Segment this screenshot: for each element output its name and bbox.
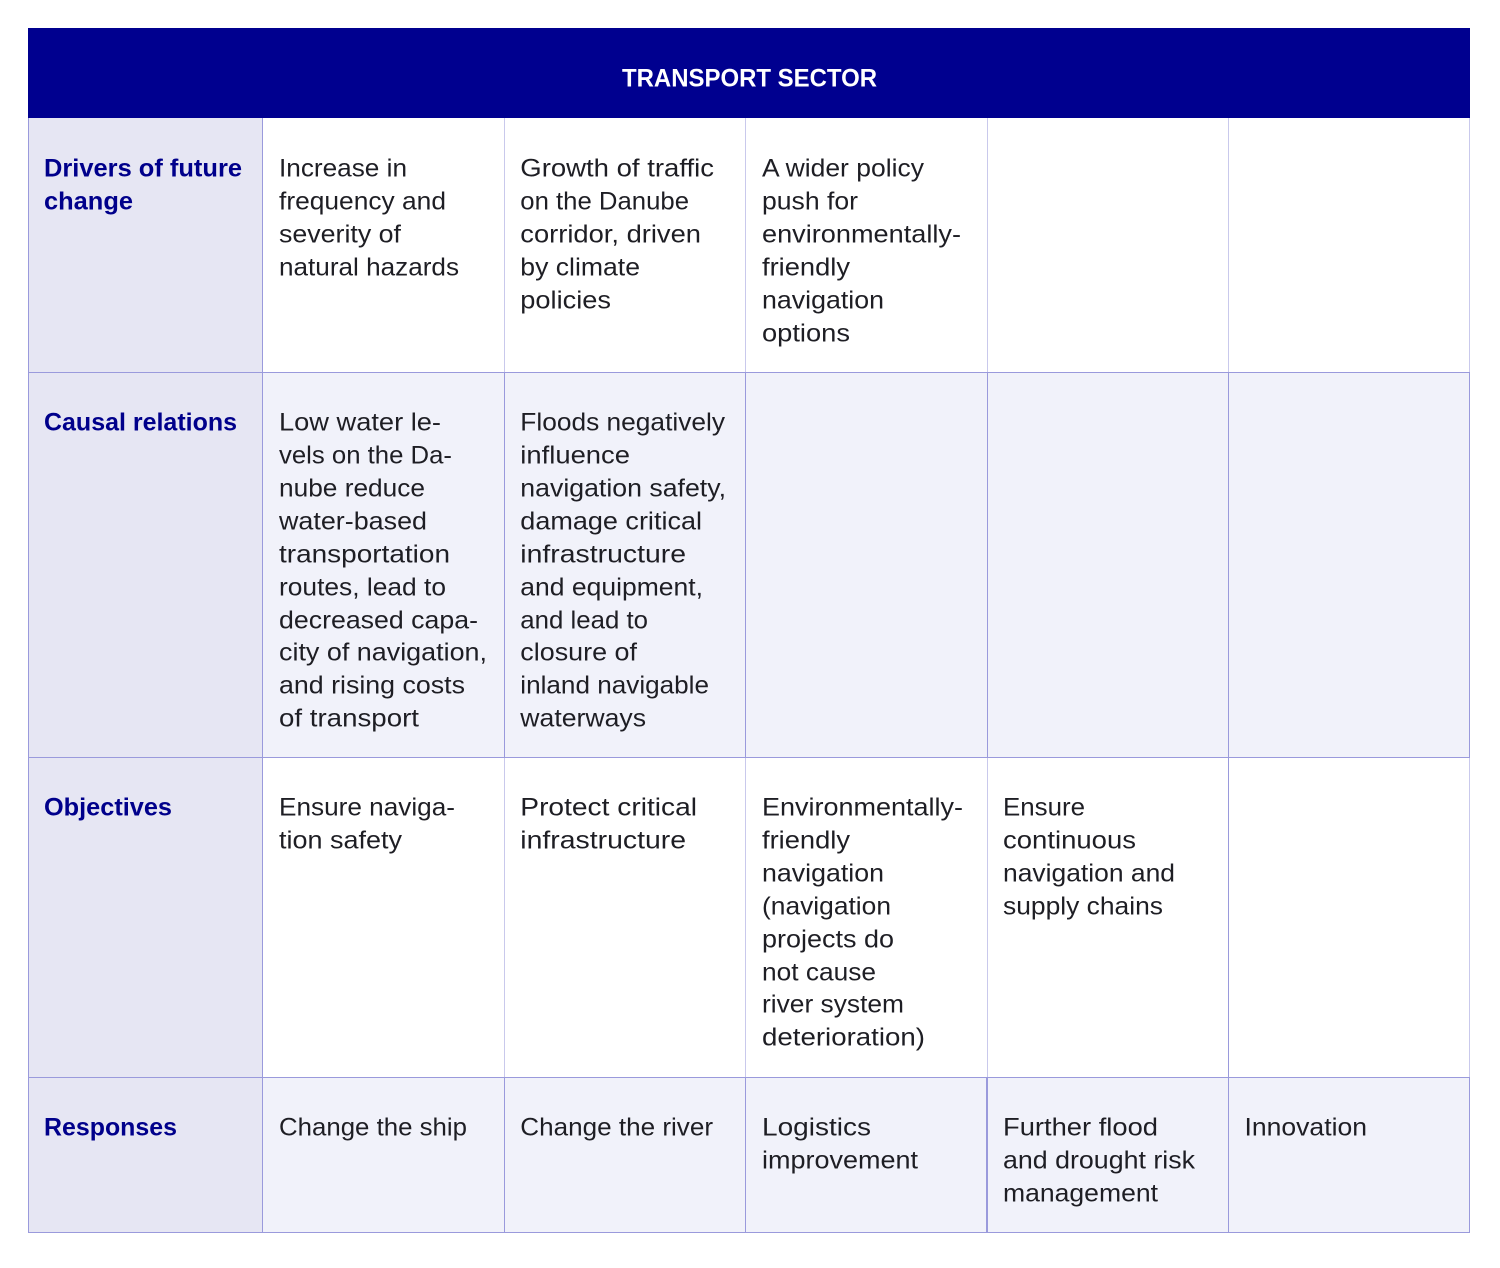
response: flood and drought risk management: Further flood — [1003, 1113, 1158, 1141]
row heading: responses: Responses — [44, 1113, 177, 1141]
objective: environmentally-friendly navigation: Environmentally- — [762, 793, 963, 821]
objective: navigation safety: tion safety — [279, 826, 403, 854]
causal relation: low water levels: decreased capa- — [279, 606, 478, 634]
causal relation: low water levels: city of navigation, — [279, 638, 487, 666]
response: flood and drought risk management — [1003, 1113, 1196, 1207]
objective: navigation safety: Ensure naviga- — [279, 793, 455, 821]
objective: continuous navigation — [1003, 793, 1175, 920]
objective: protect infrastructure: Protect critical — [520, 793, 697, 821]
response: logistics improvement: Logistics — [762, 1113, 871, 1141]
driver: traffic growth: Growth of traffic — [520, 154, 714, 182]
driver: policy push: push for — [762, 187, 858, 215]
causal relation: low water levels: and rising costs — [279, 671, 465, 699]
driver: policy push: navigation — [762, 286, 884, 314]
row heading: drivers of future change: change — [44, 187, 133, 215]
response: innovation: Innovation — [1244, 1113, 1367, 1141]
row heading: objectives: Objectives — [44, 793, 172, 821]
response: change the ship: Change the ship — [279, 1113, 467, 1141]
causal relation: floods: Floods negatively — [520, 408, 726, 436]
driver: natural hazards: severity of — [279, 220, 401, 248]
label column background — [29, 118, 263, 1232]
objective: environmentally-friendly navigation — [762, 793, 963, 1051]
driver: traffic growth: on the Danube — [520, 187, 689, 215]
objective: environmentally-friendly navigation: navigation — [762, 859, 884, 887]
causal relation: low water levels: of transport — [279, 704, 419, 732]
row heading: drivers of future change — [44, 154, 242, 215]
objective: continuous navigation: Ensure — [1003, 793, 1085, 821]
driver: natural hazards: Increase in — [279, 154, 407, 182]
response: logistics improvement: improvement — [762, 1146, 918, 1174]
driver: traffic growth: by climate — [520, 253, 640, 281]
response: flood and drought risk management: management — [1003, 1179, 1158, 1207]
objective: environmentally-friendly navigation: (navigation — [762, 892, 891, 920]
objective: protect infrastructure — [520, 793, 697, 854]
response: logistics improvement — [762, 1113, 918, 1174]
driver: policy push: A wider policy — [762, 154, 925, 182]
objective: environmentally-friendly navigation: river system — [762, 990, 904, 1018]
objective: environmentally-friendly navigation: deterioration) — [762, 1023, 925, 1051]
causal relation: floods: waterways — [519, 704, 646, 732]
causal relation: low water levels: water-based — [278, 507, 427, 535]
objective: environmentally-friendly navigation: not cause — [762, 958, 876, 986]
row band: causal relations — [263, 372, 1470, 757]
response: change the river: Change the river — [520, 1113, 713, 1141]
objective: navigation safety — [279, 793, 455, 854]
objective: protect infrastructure: infrastructure — [520, 826, 686, 854]
row band: responses — [263, 1077, 1470, 1232]
driver: traffic growth — [520, 154, 714, 314]
causal relation: floods: infrastructure — [520, 540, 686, 568]
objective: continuous navigation: continuous — [1003, 826, 1136, 854]
causal relation: low water levels: routes, lead to — [279, 573, 446, 601]
causal relation: low water levels: transportation — [279, 540, 450, 568]
causal relation: floods: inland navigable — [520, 671, 709, 699]
causal relation: low water levels: nube reduce — [279, 474, 425, 502]
driver: natural hazards — [279, 154, 459, 281]
driver: policy push — [762, 154, 961, 347]
driver: natural hazards: natural hazards — [279, 253, 459, 281]
driver: natural hazards: frequency and — [279, 187, 446, 215]
driver: traffic growth: policies — [520, 286, 611, 314]
driver: policy push: options — [762, 319, 850, 347]
causal relation: floods: damage critical — [520, 507, 702, 535]
causal relation: floods: influence — [520, 441, 630, 469]
objective: continuous navigation: supply chains — [1003, 892, 1163, 920]
row heading: causal relations: Causal relations — [44, 408, 237, 436]
title banner — [28, 28, 1470, 118]
causal relation: low water levels — [278, 408, 487, 732]
causal relation: floods — [519, 408, 726, 732]
causal relation: floods: closure of — [520, 638, 637, 666]
response: flood and drought risk management: and drought risk — [1003, 1146, 1196, 1174]
causal relation: low water levels: vels on the Da- — [279, 441, 452, 469]
causal relation: floods: and equipment, — [520, 573, 703, 601]
objective: environmentally-friendly navigation: projects do — [762, 925, 894, 953]
driver: policy push: friendly — [762, 253, 851, 281]
driver: policy push: environmentally- — [762, 220, 961, 248]
objective: environmentally-friendly navigation: friendly — [762, 826, 851, 854]
causal relation: low water levels: Low water le- — [279, 408, 441, 436]
row heading: drivers of future change: Drivers of future — [44, 154, 242, 182]
title banner: TRANSPORT SECTOR — [622, 64, 877, 92]
objective: continuous navigation: navigation and — [1003, 859, 1175, 887]
driver: traffic growth: corridor, driven — [520, 220, 701, 248]
causal relation: floods: navigation safety, — [520, 474, 726, 502]
causal relation: floods: and lead to — [520, 606, 648, 634]
